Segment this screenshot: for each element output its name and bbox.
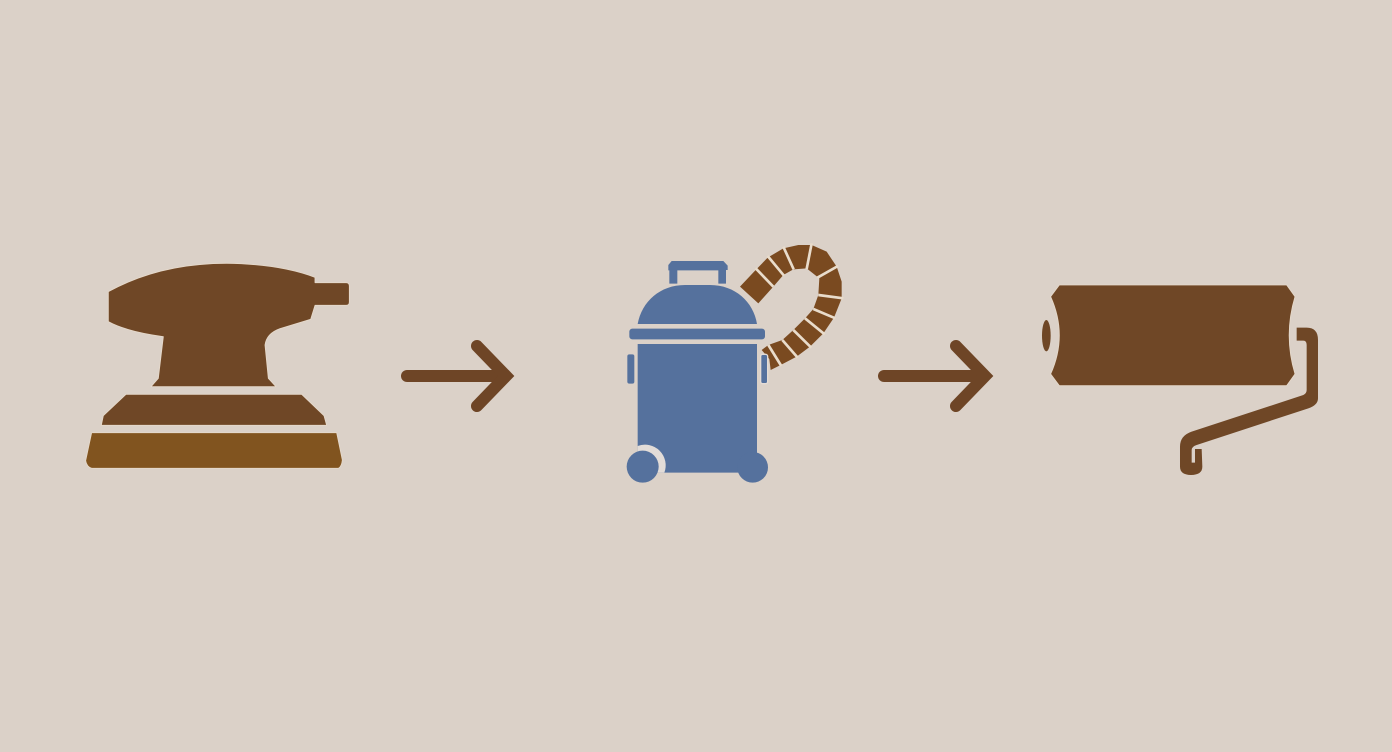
vacuum wheel right (737, 452, 768, 483)
vacuum wheel left (627, 445, 666, 483)
icon: paint roller (1042, 285, 1318, 475)
sander base (86, 433, 342, 468)
vacuum hose (740, 243, 843, 370)
icon: orbital sander (86, 263, 349, 468)
roller handle frame (1180, 328, 1318, 475)
arrow: sander to vacuum (407, 346, 506, 406)
arrow: vacuum to roller (884, 346, 985, 406)
vacuum side grip left (627, 354, 634, 384)
icon: shop vacuum (627, 243, 843, 483)
vacuum lid band (629, 329, 765, 339)
vacuum handle (668, 261, 728, 284)
sander body (108, 263, 349, 387)
roller sleeve (1051, 285, 1295, 386)
vacuum dome lid (638, 285, 757, 324)
sander pad (101, 394, 327, 425)
vacuum side grip right (761, 354, 768, 384)
vacuum canister (638, 344, 757, 473)
roller end cap (1042, 320, 1051, 351)
